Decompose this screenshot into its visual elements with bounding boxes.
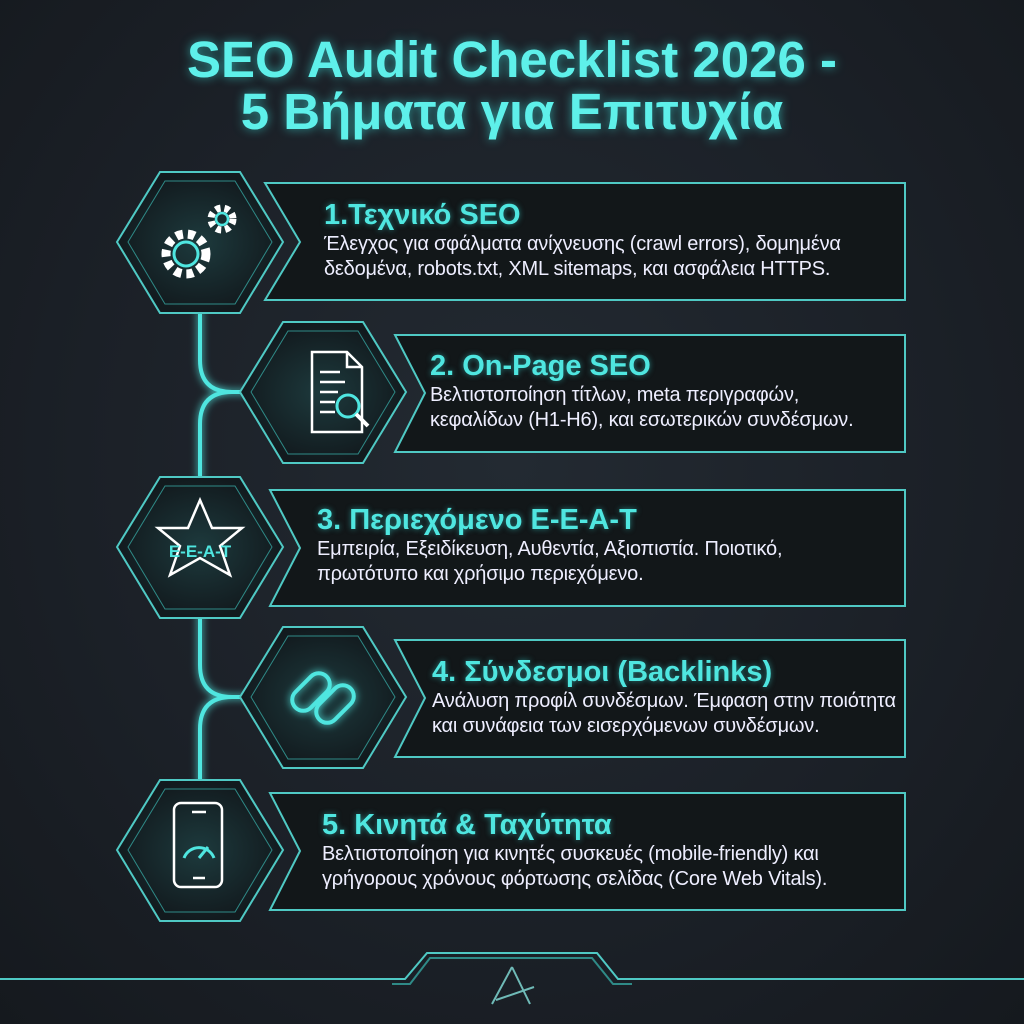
step 1 text: Έλεγχος για σφάλματα ανίχνευσης (crawl errors), δομημένα [324, 233, 841, 255]
panels [265, 183, 905, 910]
step 2 text: κεφαλίδων (H1-H6), και εσωτερικών συνδέσμων. [430, 409, 853, 431]
step 2 text: 2. On-Page SEO [430, 350, 651, 382]
step 4 text: Ανάλυση προφίλ συνδέσμων. Έμφαση στην ποιότητα [432, 690, 896, 712]
title [184, 31, 840, 144]
step 5 text: Βελτιστοποίηση για κινητές συσκευές (mobile-friendly) και [322, 843, 819, 865]
step 5 text [320, 809, 827, 890]
step 5 text: γρήγορους χρόνους φόρτωσης σελίδας (Core Web Vitals). [322, 868, 827, 890]
footer frame [0, 953, 1024, 1004]
step 2 text: Βελτιστοποίηση τίτλων, meta περιγραφών, [430, 384, 799, 406]
connector lines [200, 310, 270, 785]
icon: gears [166, 208, 233, 274]
step 1 text: δεδομένα, robots.txt, XML sitemaps, και ασφάλεια HTTPS. [324, 258, 830, 280]
icon: chain link [288, 669, 358, 727]
icon: EEAT badge: E-E-A-T [169, 542, 232, 561]
step 4 text: 4. Σύνδεσμοι (Backlinks) [432, 656, 772, 688]
hexagons [117, 172, 406, 921]
step 3 text: Εμπειρία, Εξειδίκευση, Αυθεντία, Αξιοπιστία. Ποιοτικό, [317, 538, 782, 560]
step 3 text: πρωτότυπο και χρήσιμο περιεχόμενο. [317, 563, 643, 585]
step 3 text: 3. Περιεχόμενο E-E-A-T [317, 504, 637, 536]
title: 5 Βήματα για Επιτυχία [241, 83, 783, 140]
step 4 text [430, 656, 896, 737]
icon: mobile speed [174, 803, 222, 887]
icon: EEAT badge [158, 500, 242, 575]
title: SEO Audit Checklist 2026 - [187, 31, 837, 88]
step 5 text: 5. Κινητά & Ταχύτητα [322, 809, 612, 841]
step 1 text: 1.Τεχνικό SEO [324, 199, 521, 231]
step 2 text [428, 350, 853, 431]
step 3 text [316, 504, 782, 585]
icon: document search [312, 352, 368, 432]
step 1 text [324, 199, 841, 280]
step 4 text: και συνάφεια των εισερχόμενων συνδέσμων. [432, 715, 819, 737]
